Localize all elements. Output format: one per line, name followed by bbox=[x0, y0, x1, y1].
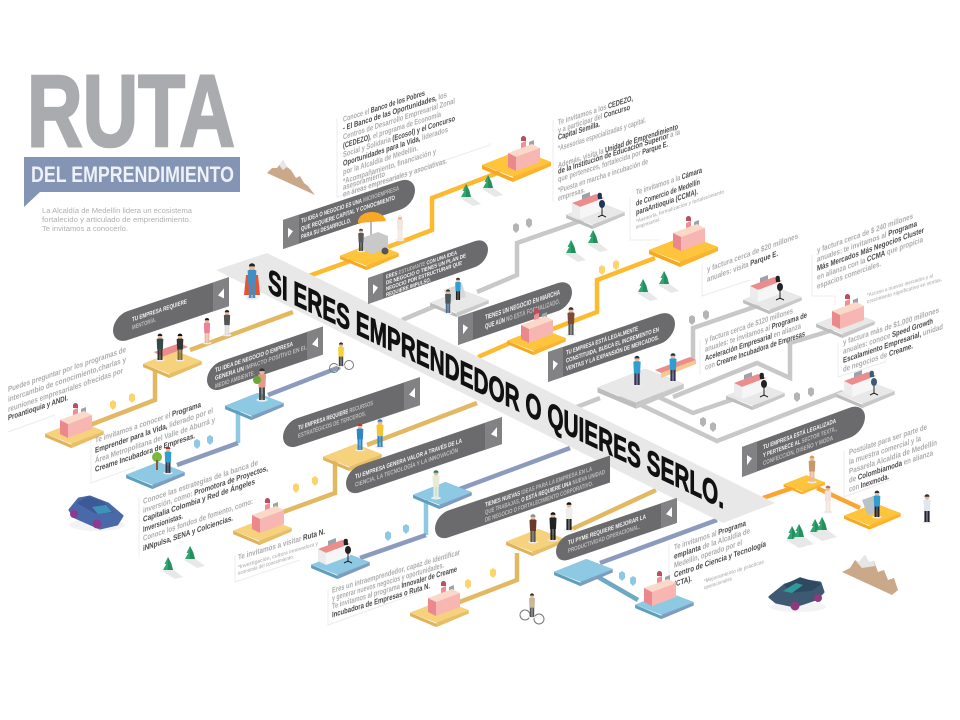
icon: bicycle rider bbox=[520, 593, 544, 624]
pill: sector textil: TU EMPRESA ESTÁ LEGALIZADA bbox=[763, 416, 836, 451]
text block: camara de comercio: paraAntioquia (CCMA). bbox=[636, 187, 698, 217]
text block: centro de ciencia y tecnologia bbox=[669, 512, 766, 596]
text block: cedezo capital semilla bbox=[553, 78, 680, 203]
pill: legalmente constituida: TU EMPRESA ESTÁ LEGALMENTE bbox=[566, 323, 638, 357]
intro text: La Alcaldía de Medellín lidera un ecosistema bbox=[42, 206, 193, 215]
pill: mentoria: TU EMPRESA REQUIERE bbox=[132, 298, 187, 324]
icon: scientist bbox=[431, 470, 441, 500]
text block: camara de comercio bbox=[630, 158, 724, 240]
text block: 120 millones: con Creame Incubadora de Empresas bbox=[705, 329, 805, 372]
text block: ruta n: economía del conocimiento. bbox=[238, 554, 294, 577]
pill: microempresa: PARA SU DESARROLLO. bbox=[301, 217, 351, 241]
text block: banco de los pobres: - El Banco de las Oportunidades, los bbox=[343, 90, 447, 133]
ribbon: del emprendimiento: DEL EMPRENDIMIENTO bbox=[31, 162, 234, 187]
pill: sector textil: CONFECCIÓN, DISEÑO Y MODA bbox=[763, 433, 833, 467]
text block: intraemprendedor bbox=[328, 548, 461, 625]
icon: food cart with umbrella bbox=[357, 212, 404, 254]
paths: bright yellow routes bbox=[306, 172, 655, 357]
text block: banco de los pobres: Centros de Desarrollo Empresarial Zonal bbox=[343, 96, 455, 142]
text block: intraemprendedor: Te invitamos al programa Innovaler de Creame bbox=[332, 565, 457, 611]
icon: superhero bbox=[244, 263, 260, 300]
icons: work desks bbox=[318, 192, 878, 565]
pill: recursos: ESTRATÉGICOS DE TERCEROS. bbox=[298, 408, 366, 440]
text block: cedezo capital semilla: *Puesta en marcha e incubación de bbox=[558, 157, 648, 195]
pill: nuevas ideas bbox=[435, 456, 610, 542]
pill: nuevas ideas: TIENES NUEVAS IDEAS PARA LA EMPRESA EN LA bbox=[485, 466, 592, 509]
text block: cedezo capital semilla: y a participar del Concurso bbox=[558, 103, 630, 135]
text block: 240 millones: espacios comerciales. bbox=[817, 259, 881, 291]
text block: banco de los pobres: *Acompañamiento, financiación y bbox=[343, 147, 436, 186]
text block: 1000 millones bbox=[838, 304, 943, 377]
pill: legalmente constituida bbox=[548, 309, 675, 382]
text block: ruta n: Te invitamos a visitar Ruta N. bbox=[238, 527, 325, 562]
pill: productividad: PRODUCTIVIDAD OPERACIONAL. bbox=[568, 524, 640, 555]
text block: banco de los pobres: por la Alcaldía de Medellín. bbox=[343, 144, 418, 177]
text block: banco de los pobres: Social y Solidaria (Ecosol) y el Concurso bbox=[343, 114, 455, 159]
text block: 20 millones: y factura cerca de $20 millones bbox=[707, 231, 798, 274]
text block: 1000 millones: de negocios de Creame. bbox=[843, 341, 913, 374]
pill: medio ambiente bbox=[207, 327, 323, 394]
text block: centro de ciencia y tecnologia: Centro de Ciencia y Tecnología bbox=[674, 539, 766, 579]
text block: proantioquia: reuniones empresariales ofrecidas por bbox=[8, 366, 124, 414]
pill: negocio en marcha bbox=[458, 278, 572, 345]
text block: camara de comercio: de Comercio de Medellín bbox=[636, 177, 700, 208]
icons: diamonds grey bbox=[513, 218, 814, 432]
text block: banco de los pobres: (CEDEZO), el programa de Economía bbox=[343, 110, 441, 150]
icon: cyclist bbox=[330, 342, 354, 372]
text block: banca de inversion: Inversionistas. bbox=[143, 512, 183, 534]
text block: banca de inversion: iNNpulsa, SENA y Colciencias. bbox=[143, 514, 233, 553]
pill: sector textil bbox=[742, 402, 865, 477]
text block: intraemprendedor: y generar nuevos negocios y oportunidades. bbox=[332, 561, 444, 603]
text block: colombiamoda bbox=[844, 419, 937, 497]
icons: fashion and businessman bbox=[807, 456, 932, 524]
ribbon: del emprendimiento bbox=[24, 157, 240, 207]
icons: mentoring group bbox=[154, 310, 232, 361]
text block: cedezo capital semilla: que perteneces, fortalecida por Parque E. bbox=[558, 139, 668, 184]
intro text: fortalecido y articulado de emprendimiento. bbox=[42, 215, 191, 224]
text block: ruta n: *Investigación, cultura innovadora y bbox=[238, 541, 319, 571]
text block: banco de los pobres: Oportunidades para la Vida, liderados bbox=[343, 125, 448, 168]
pill: microempresa: QUE REQUIERE CAPITAL Y CONOCIMIENTO bbox=[301, 195, 395, 233]
text block: proantioquia bbox=[8, 345, 126, 432]
pill: ciencia y tecnologia: TU EMPRESA GENERA VALOR A TRAVÉS DE LA bbox=[355, 436, 462, 481]
text block: 240 millones: anuales: te invitamos al Programa bbox=[817, 219, 917, 264]
text block: cedezo capital semilla: de la Institución de Educación Superior a la bbox=[558, 127, 680, 176]
icons: diamonds blue bbox=[194, 435, 636, 586]
platforms: pale yellow bbox=[45, 351, 565, 627]
text block: centro de ciencia y tecnologia: (CTA). bbox=[674, 574, 692, 589]
text block: banca de inversion: Conoce los fondos de fomento, como: bbox=[143, 497, 253, 543]
pill: legalmente constituida: CONSTITUIDA, BUSCA EL INCREMENTO EN bbox=[566, 326, 659, 365]
text block: emprender para la vida: Te invitamos a conocer el Programa bbox=[95, 400, 201, 445]
text block: 240 millones: en alianza con la CCMA que propicia bbox=[817, 235, 923, 282]
text block: 120 millones: Aceleración Empresarial en alianza bbox=[705, 321, 801, 363]
text block: banca de inversion: inversión, como: Promotora de Proyectos, bbox=[143, 464, 268, 515]
pill: microempresa: TU IDEA O NEGOCIO ES UNA MICROEMPRESA bbox=[301, 185, 399, 225]
platforms: grey bbox=[430, 202, 895, 410]
icons: diamonds yellow bbox=[110, 260, 619, 589]
text block: 120 millones: anuales: te invitamos al Programa de bbox=[705, 310, 807, 354]
icons: reception desks bbox=[60, 136, 864, 616]
text block: 240 millones bbox=[812, 207, 942, 305]
pill: estudiante: NEGOCIO POR ESTRUCTURAR QUE bbox=[386, 261, 462, 293]
text block: proantioquia: intercambio de conocimiento,charlas y bbox=[8, 355, 126, 404]
pill: negocio en marcha: TIENES UN NEGOCIO EN MARCHA bbox=[485, 288, 560, 322]
pill: nuevas ideas: DE NEGOCIO O FORTALECIMIENTO CORPORATIVO. bbox=[485, 480, 593, 524]
text block: cedezo capital semilla: empresas. bbox=[558, 185, 585, 203]
pill: estudiante: ERES ESTUDIANTE CON UNA IDEA bbox=[386, 250, 457, 281]
icon: person standing bbox=[566, 307, 576, 336]
pill: productividad bbox=[556, 498, 677, 564]
text block: centro de ciencia y tecnologia: emplanta de la Alcaldía de bbox=[674, 526, 750, 561]
text block: centro de ciencia y tecnologia: operacionales bbox=[704, 576, 732, 591]
text block: colombiamoda: Pasarela Alcaldía de Medellín bbox=[849, 438, 937, 476]
icon: man with plant bbox=[253, 368, 268, 402]
pill: microempresa bbox=[283, 176, 415, 249]
icon: mountain bottom bbox=[842, 555, 898, 595]
pill: ciencia y tecnologia bbox=[346, 417, 502, 497]
pill: estudiante: DE NEGOCIO O TIENES UN PLAN DE bbox=[386, 253, 466, 287]
title: RUTA: RUTA bbox=[27, 54, 235, 168]
intro text: Te invitamos a conocerlo. bbox=[42, 224, 128, 233]
text block: centro de ciencia y tecnologia: Medellín, operado por el bbox=[674, 538, 742, 570]
pill: recursos bbox=[283, 377, 420, 451]
text block: banco de los pobres: asesoramiento bbox=[343, 170, 385, 192]
text block: colombiamoda: con Inexmoda. bbox=[849, 472, 889, 494]
text block: camara de comercio: *Asesoría, formalización y fortalecimiento bbox=[636, 189, 724, 225]
text block: banca de inversion: Capitalia Colombia y Red de Ángeles bbox=[143, 476, 255, 524]
text block: banco de los pobres bbox=[337, 79, 490, 199]
text block: 1000 millones: Escalamiento Empresarial, unidad bbox=[843, 322, 943, 365]
text block: colombiamoda: Postúlate para ser parte de bbox=[849, 422, 927, 457]
text block: ruta n bbox=[235, 527, 325, 582]
text block: cedezo capital semilla: Capital Semilla. bbox=[558, 120, 600, 142]
text block: intraemprendedor: Incubadora de Empresas o Ruta N. bbox=[332, 581, 430, 619]
pill: medio ambiente: MEDIO AMBIENTE. bbox=[215, 370, 255, 390]
main banner bbox=[216, 253, 775, 523]
text block: proantioquia: Proantioquia y ANDI. bbox=[8, 393, 68, 422]
paths: orange routes on right bbox=[763, 487, 860, 508]
pill: negocio en marcha: QUE AÚN NO ESTÁ FORMALIZADO. bbox=[485, 297, 560, 331]
paths: grey routes bbox=[402, 220, 843, 441]
paths: tan routes bbox=[90, 312, 656, 603]
text block: banco de los pobres: Conoce el Banco de los Pobres bbox=[343, 88, 425, 124]
icon: blue car bbox=[69, 497, 125, 531]
pill: productividad: TU PYME REQUIERE MEJORAR LA bbox=[568, 513, 646, 547]
icons: workers bbox=[355, 419, 385, 451]
pill: estudiante: REQUIERE IMPULSO. bbox=[386, 277, 431, 299]
text block: 120 millones: y factura cerca de $120 millones bbox=[705, 306, 793, 345]
icons: businessmen bbox=[528, 502, 574, 544]
intro text bbox=[42, 206, 193, 233]
text block: 240 millones: y factura cerca de $ 240 millones bbox=[817, 212, 913, 255]
text block: banco de los pobres: en áreas empresariales y asociativas. bbox=[343, 156, 447, 199]
text block: banca de inversion bbox=[139, 455, 268, 557]
icons: trees bbox=[162, 175, 837, 579]
icon: tree and person bbox=[152, 447, 173, 474]
text block: 240 millones: crecimiento significativo en ventas. bbox=[867, 277, 942, 305]
text block: emprender para la vida: Emprender para la Vida, liderado por el bbox=[95, 406, 213, 455]
text block: banca de inversion: Conoce las estrategias de la banca de bbox=[143, 458, 258, 506]
text block: centro de ciencia y tecnologia: *Mejoramiento de prácticas bbox=[704, 559, 764, 585]
text block: 240 millones: Más Mercados Más Negocios Cluster bbox=[817, 225, 925, 273]
text block: emprender para la vida bbox=[91, 395, 215, 483]
text block: 20 millones bbox=[702, 231, 798, 296]
text block: proantioquia: Puedes preguntar por los programas de bbox=[8, 345, 126, 394]
text block: emprender para la vida: Área Metropolitana del Valle de Aburrá y bbox=[95, 414, 215, 465]
pill: nuevas ideas: QUE TRABAJAS, O ESTÁ REQUIERE UNA NUEVA UNIDAD bbox=[485, 467, 605, 516]
text block: camara de comercio: Te invitamos a la Cámara bbox=[636, 166, 702, 197]
icon: teachers and desks bbox=[632, 353, 696, 387]
platforms: blue bbox=[126, 393, 694, 619]
pill: estudiante bbox=[368, 237, 488, 305]
pill: mentoria: MENTORÍA. bbox=[132, 315, 156, 332]
platforms: bright yellow bbox=[340, 150, 901, 530]
text block: cedezo capital semilla: Además, visita la Unidad de Emprendimiento bbox=[558, 122, 678, 170]
text block: cedezo capital semilla: Te invitamos a los CEDEZO, bbox=[558, 94, 633, 127]
icon: dark car bbox=[770, 578, 826, 612]
paths: blue routes bbox=[177, 367, 717, 600]
text block: camara de comercio: empresarial. bbox=[636, 217, 660, 231]
text block: cedezo capital semilla: *Asesorías especializadas y capital. bbox=[558, 116, 646, 153]
text block: colombiamoda: de Colombiamoda en alianza bbox=[849, 448, 933, 485]
pill: sector textil: Y PERTENECE AL SECTOR TEXTIL, bbox=[763, 425, 837, 459]
text block: 240 millones: *Acceso a nuevos mercados y al bbox=[867, 273, 933, 299]
icon: students on bench bbox=[444, 278, 466, 314]
text block: emprender para la vida: Creame Incubadora de Empresas. bbox=[95, 431, 195, 474]
icon: mountain top bbox=[267, 160, 315, 195]
pill: medio ambiente: GENERA UN IMPACTO POSITIVO EN EL bbox=[215, 344, 307, 382]
text block: 1000 millones: anuales: conoce Speed Growth bbox=[843, 317, 933, 356]
pill: legalmente constituida: VENTAS Y LA EXPANSIÓN DE MERCADOS. bbox=[566, 332, 659, 373]
pill: recursos: TU EMPRESA REQUIERE RECURSOS bbox=[298, 400, 373, 432]
pill: mentoria bbox=[113, 277, 229, 345]
text block: 120 millones bbox=[700, 301, 807, 375]
text block: colombiamoda: la muestra comercial y la bbox=[849, 434, 921, 466]
text block: centro de ciencia y tecnologia: Te invitamos al Programa bbox=[674, 519, 746, 552]
text block: intraemprendedor: Eres un intraemprendedor, capaz de identificar bbox=[332, 548, 461, 595]
pill: ciencia y tecnologia: CIENCIA, LA TECNOLOGÍA Y LA INNOVACIÓN bbox=[355, 445, 458, 489]
pill: medio ambiente: TU IDEA DE NEGOCIO O EMPRESA bbox=[215, 341, 293, 374]
text block: 20 millones: anuales: visita Parque E. bbox=[707, 249, 778, 284]
